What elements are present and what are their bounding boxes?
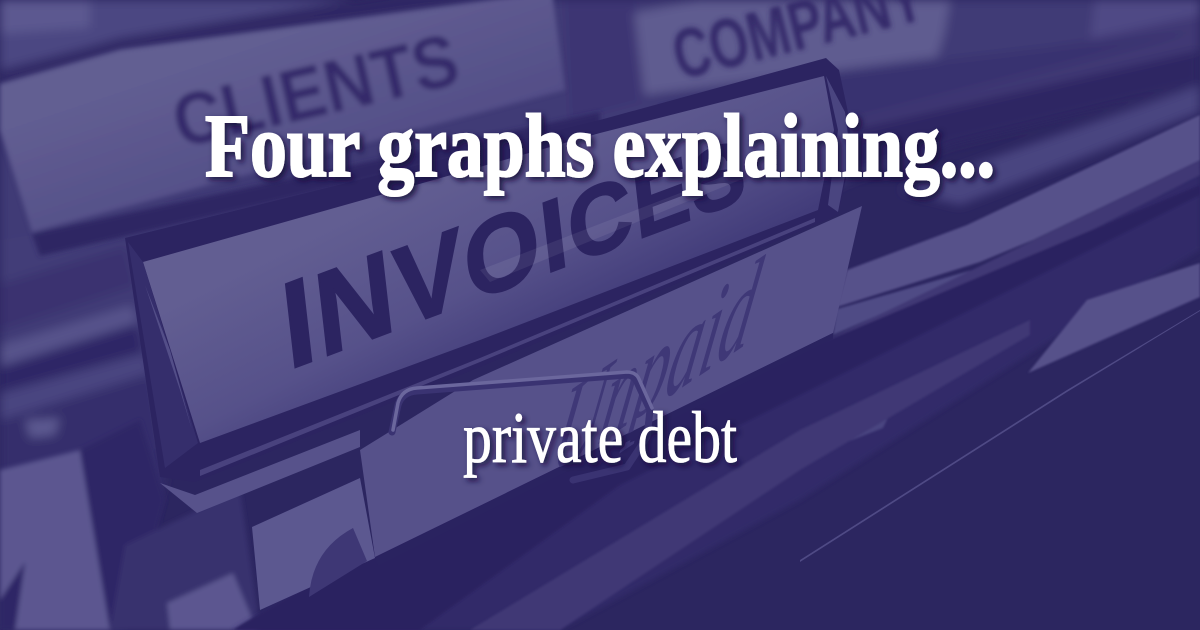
lower centre floor bbox=[233, 170, 1200, 630]
folder: invoices tab bbox=[125, 58, 852, 482]
paper: unpaid note bbox=[360, 206, 862, 557]
paper clip bbox=[392, 372, 652, 480]
INVOICES label: INVOICES bbox=[276, 90, 752, 396]
title: Four graphs explaining... bbox=[205, 97, 995, 196]
right side rails and light panels bbox=[233, 115, 1200, 630]
folder: clients tab bbox=[0, 0, 931, 256]
handwritten Unpaid: Unpaid bbox=[542, 228, 772, 506]
rail below tab bbox=[160, 430, 360, 513]
subtitle: private debt bbox=[463, 397, 737, 478]
CLIENTS label: CLIENTS bbox=[165, 17, 466, 164]
small card with semicircle bbox=[252, 478, 375, 610]
lower left folders bbox=[0, 420, 260, 630]
